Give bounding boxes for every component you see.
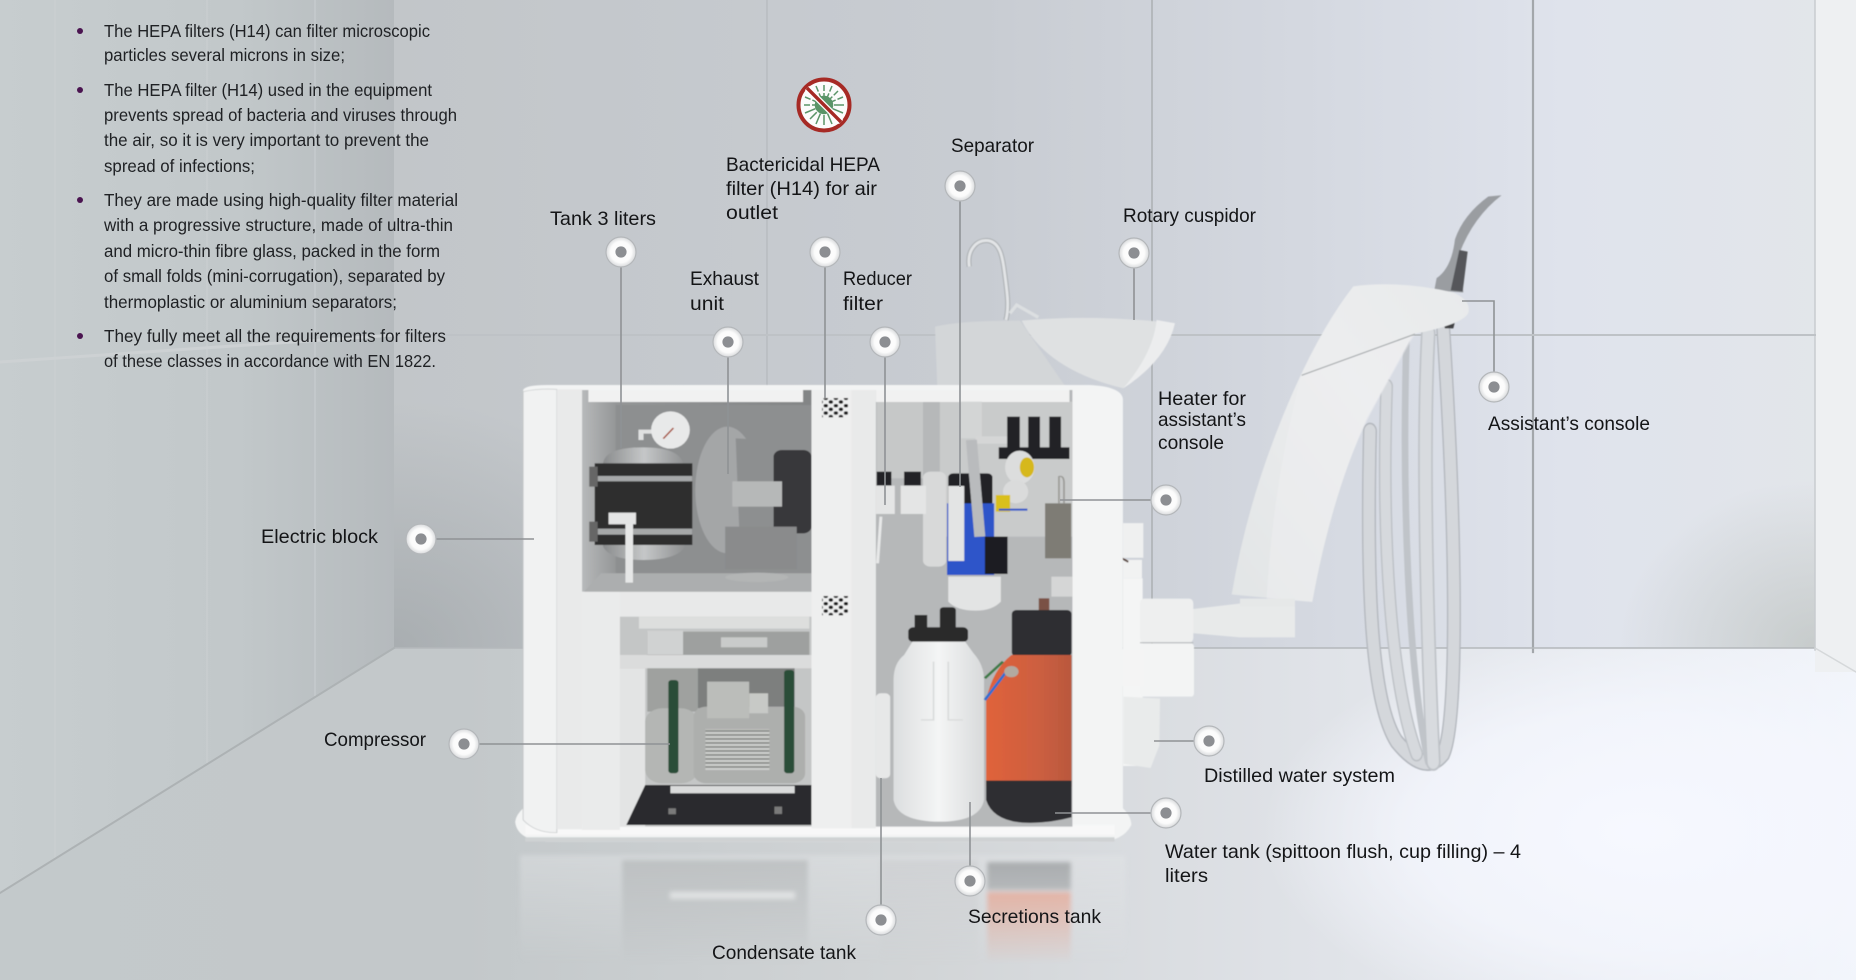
valve manifold bbox=[999, 447, 1069, 459]
bowl bbox=[1022, 318, 1175, 388]
callout: compressor bbox=[324, 729, 670, 759]
drain pipes bbox=[961, 402, 982, 438]
bullet 4 bbox=[77, 326, 446, 371]
condensate tank bbox=[876, 693, 890, 778]
bullet 1 bbox=[77, 21, 430, 65]
callout: water tank: Water tank (spittoon flush, cup filling) – 4 bbox=[1165, 841, 1521, 863]
bullet 3: of small folds (mini-corrugation), separated by bbox=[104, 266, 445, 286]
console body bbox=[1232, 284, 1469, 602]
heater bbox=[1045, 503, 1071, 558]
support arm bbox=[1185, 604, 1295, 637]
cuspidor basin and bowl bbox=[935, 241, 1175, 388]
hoses bbox=[1369, 329, 1454, 762]
bullet 4: of these classes in accordance with EN 1822. bbox=[104, 351, 436, 371]
callout: reducer filter: filter bbox=[843, 293, 884, 315]
callout: water tank: liters bbox=[1165, 865, 1208, 887]
callout: tank 3 liters bbox=[550, 208, 656, 448]
assistant's console with arm and hoses bbox=[1110, 195, 1502, 768]
callout: compressor: Compressor bbox=[324, 729, 426, 751]
callout: separator bbox=[945, 135, 1034, 487]
bullet 2: spread of infections; bbox=[104, 156, 255, 176]
callout: reducer filter: Reducer bbox=[843, 268, 912, 290]
callout: heater for assistant's console bbox=[1060, 388, 1247, 515]
right bay: separator, tanks, heater bbox=[876, 390, 1072, 827]
callout: electric block bbox=[261, 524, 534, 554]
bullet 2: prevents spread of bacteria and viruses through bbox=[104, 105, 457, 125]
callout: bactericidal HEPA filter bbox=[726, 154, 880, 398]
gauge bbox=[641, 432, 652, 440]
callout: water tank bbox=[1055, 798, 1521, 887]
callout: exhaust unit: Exhaust bbox=[690, 268, 760, 290]
floor reflection of cabinet bbox=[521, 856, 1072, 954]
callout: electric block: Electric block bbox=[261, 526, 378, 548]
callout: bactericidal HEPA filter: filter (H14) for air bbox=[726, 178, 878, 200]
callout: bactericidal HEPA filter: outlet bbox=[726, 202, 779, 224]
callout: exhaust unit: unit bbox=[690, 293, 725, 315]
basin bbox=[935, 321, 1067, 388]
bullet 3: with a progressive structure, made of ultra-thin bbox=[103, 215, 453, 235]
icon: no virus bbox=[798, 80, 850, 130]
tank bbox=[603, 447, 685, 560]
bullet 3 bbox=[77, 190, 458, 312]
callout: distilled water system bbox=[1154, 726, 1395, 787]
callout: tank 3 liters: Tank 3 liters bbox=[550, 208, 656, 230]
callout: condensate tank: Condensate tank bbox=[712, 942, 856, 964]
bullet list bbox=[77, 21, 458, 371]
callout: heater for assistant's console: assistant’s bbox=[1158, 409, 1246, 431]
bullet 1: The HEPA filters (H14) can filter microscopic bbox=[104, 21, 430, 41]
callout: heater for assistant's console: console bbox=[1158, 432, 1224, 454]
perforated vents bbox=[822, 398, 848, 417]
handpiece bbox=[1434, 195, 1502, 292]
callout: heater for assistant's console: Heater for bbox=[1158, 388, 1247, 410]
exhaust blower bbox=[774, 450, 811, 533]
bullet 1: particles several microns in size; bbox=[104, 45, 345, 65]
bullet 3: They are made using high-quality filter material bbox=[104, 190, 458, 210]
faucet bbox=[969, 241, 1008, 320]
callout: separator: Separator bbox=[951, 135, 1034, 157]
callout: condensate tank bbox=[712, 778, 896, 964]
secretions tank bbox=[915, 615, 927, 630]
bullet 2: The HEPA filter (H14) used in the equipment bbox=[104, 80, 432, 100]
side door bbox=[523, 389, 557, 833]
cabinet shell bbox=[515, 385, 1131, 842]
distilled water housing bbox=[1123, 697, 1160, 768]
upper left bay: tank and blower bbox=[582, 390, 811, 592]
cabinet bbox=[515, 385, 1131, 842]
separator bbox=[948, 473, 992, 507]
callout: rotary cuspidor bbox=[1119, 205, 1256, 320]
callout: secretions tank: Secretions tank bbox=[968, 906, 1101, 928]
callout: exhaust unit bbox=[690, 268, 760, 474]
bullet 2 bbox=[77, 80, 457, 176]
bullet 4: They fully meet all the requirements for filters bbox=[104, 326, 446, 346]
callout: bactericidal HEPA filter: Bactericidal HEPA bbox=[726, 154, 880, 176]
callout: assistant's console: Assistant’s console bbox=[1488, 413, 1650, 435]
drain valve bbox=[625, 513, 633, 583]
callout: distilled water system: Distilled water system bbox=[1204, 765, 1395, 787]
callout: secretions tank bbox=[955, 802, 1101, 928]
lower left bay: compressor bbox=[620, 617, 811, 827]
reducer filters bbox=[877, 472, 891, 486]
bullet 3: thermoplastic or aluminium separators; bbox=[104, 292, 397, 312]
bullet 3: and micro-thin fibre glass, packed in the form bbox=[104, 241, 440, 261]
water tank bbox=[1039, 598, 1049, 613]
callout: reducer filter bbox=[843, 268, 912, 505]
callout: rotary cuspidor: Rotary cuspidor bbox=[1123, 205, 1256, 227]
bullet 2: the air, so it is very important to prevent the bbox=[104, 130, 429, 150]
callout: assistant's console bbox=[1462, 301, 1650, 435]
